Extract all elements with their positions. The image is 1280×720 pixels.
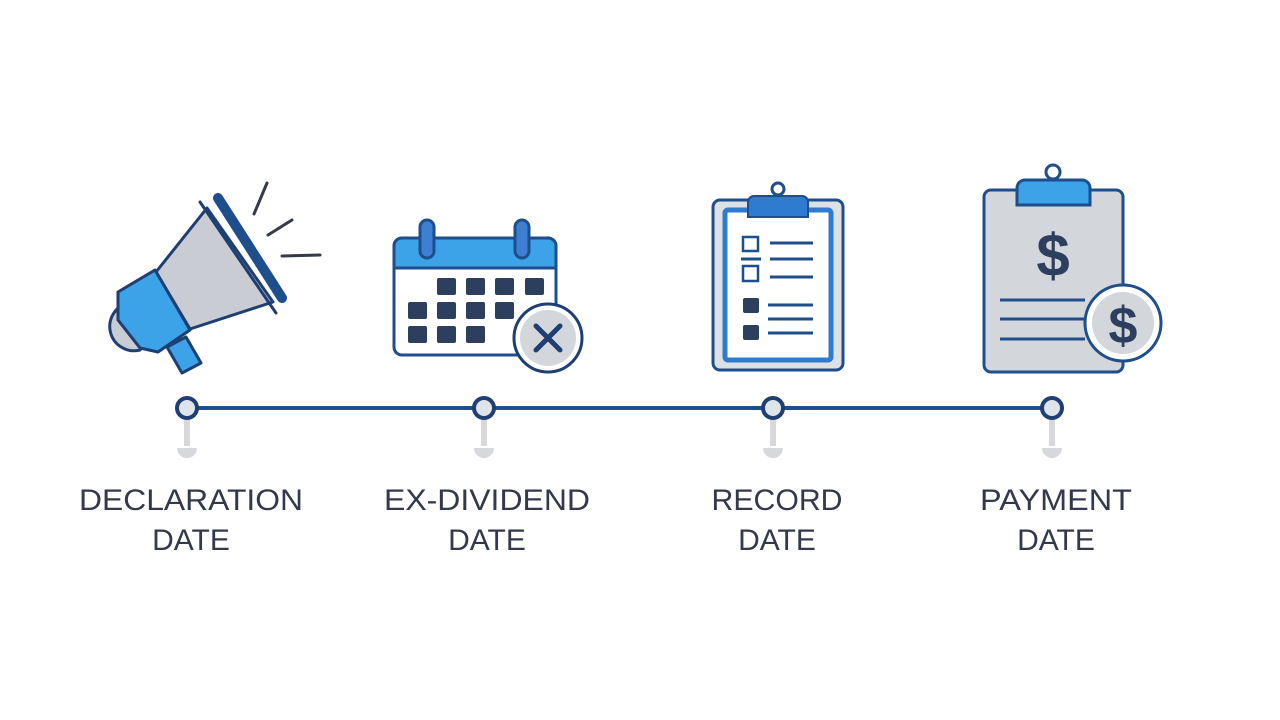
icon: calendar with x [394, 220, 582, 372]
label: record date: RECORD [712, 484, 842, 517]
icon: record clipboard [713, 183, 843, 370]
label: declaration date: DATE [152, 524, 230, 557]
label: record date: DATE [738, 524, 816, 557]
label: ex-dividend date: EX-DIVIDEND [384, 484, 590, 517]
label: ex-dividend date [384, 484, 590, 557]
timeline [177, 398, 1062, 458]
label: payment date [980, 484, 1132, 557]
label: record date [712, 484, 842, 557]
icon: payment clipboard with coin: $ [1036, 222, 1070, 289]
label: ex-dividend date: DATE [448, 524, 526, 557]
icon: megaphone [110, 183, 320, 373]
label: declaration date: DECLARATION [79, 484, 303, 517]
icon: payment clipboard with coin [984, 165, 1161, 372]
label: declaration date [79, 484, 303, 557]
icon: payment clipboard with coin: $ [1109, 297, 1138, 355]
label: payment date: DATE [1017, 524, 1095, 557]
label: payment date: PAYMENT [980, 484, 1132, 517]
